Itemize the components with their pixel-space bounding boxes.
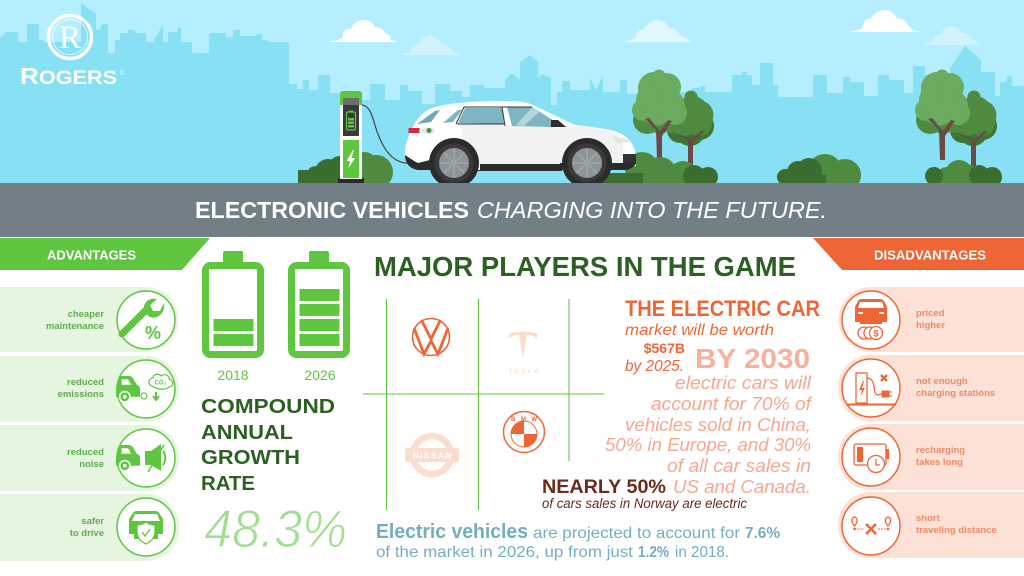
city skyline xyxy=(0,3,1024,184)
heading: compound annual growth rate: GROWTH xyxy=(201,447,300,469)
text block: by 2030: electric cars will xyxy=(675,372,812,393)
heading: major players: MAJOR PLAYERS IN THE GAME xyxy=(374,251,796,282)
bushes xyxy=(298,152,1002,191)
label: battery years: 2026 xyxy=(304,367,336,383)
text block: by 2030: 50% in Europe, and 30% xyxy=(605,434,811,455)
icon: Tesla logo: TESLA xyxy=(508,369,539,375)
row: reduced noise xyxy=(0,425,179,491)
text block: market share: 1.2% xyxy=(638,544,669,561)
label: battery years xyxy=(217,367,336,383)
row: cheaper maintenance: maintenance xyxy=(46,321,104,332)
icon: Nissan logo xyxy=(405,436,459,474)
text block: by 2030: of all car sales in xyxy=(667,455,811,476)
heading: compound annual growth rate: RATE xyxy=(201,473,255,495)
row: priced higher xyxy=(838,287,1024,352)
text block: by 2030: account for 70% of xyxy=(651,393,813,414)
text block: by 2030: US and Canada. xyxy=(673,476,811,497)
text block: electric car market xyxy=(625,296,820,375)
panel: logo grid xyxy=(363,299,604,510)
icon: battery 2026 xyxy=(292,251,346,354)
row: reduced noise: reduced xyxy=(67,447,104,458)
label: battery years: 2018 xyxy=(217,367,249,383)
cable xyxy=(362,105,429,163)
row: cheaper maintenance: % xyxy=(145,323,161,343)
row: reduced emissions: CO₂ xyxy=(155,380,167,386)
text block: market share: 7.6% xyxy=(745,525,780,542)
icon: white car xyxy=(405,101,636,188)
icon: logo Rogers: ROGERS xyxy=(20,63,117,89)
heading: disadvantages banner xyxy=(813,238,1024,270)
row: reduced noise: noise xyxy=(79,459,104,470)
row: not enough charging stations: charging stations xyxy=(916,388,995,399)
icon: logo Rogers: © xyxy=(120,70,125,77)
text block: by 2030 xyxy=(605,343,813,497)
icon: logo Rogers xyxy=(20,16,125,89)
title: ELECTRONIC VEHICLES xyxy=(195,197,469,223)
text block: electric car market: by 2025. xyxy=(625,358,684,375)
icon: charging station xyxy=(338,91,364,183)
text block: market share: of the market in 2026, up from just xyxy=(376,544,634,561)
text block: market share: in 2018. xyxy=(675,544,729,561)
row: safer to drive xyxy=(0,494,179,561)
text block: Norway xyxy=(542,477,747,511)
row: not enough charging stations: not enough xyxy=(916,376,968,387)
heading: compound annual growth rate xyxy=(201,396,335,495)
text block: electric car market: $567B xyxy=(644,340,685,356)
row: priced higher: higher xyxy=(916,320,945,331)
icon: Nissan logo: NISSAN xyxy=(412,450,452,460)
row: reduced emissions xyxy=(0,356,179,422)
trees xyxy=(632,70,997,166)
icon: BMW logo: BMW xyxy=(511,417,537,423)
heading: disadvantages banner: DISADVANTAGES xyxy=(874,248,986,262)
row: safer to drive: to drive xyxy=(70,528,104,539)
icon: logo Rogers: R xyxy=(59,20,81,56)
text block: by 2030: BY 2030 xyxy=(695,343,810,374)
row: short traveling distance: short xyxy=(916,513,941,524)
title: CHARGING INTO THE FUTURE. xyxy=(477,197,827,223)
row: reduced emissions: reduced xyxy=(67,377,104,388)
row: recharging takes long: recharging xyxy=(916,445,965,456)
row: short traveling distance: traveling distance xyxy=(916,525,997,536)
row: recharging takes long: takes long xyxy=(916,457,963,468)
icon: battery 2018 xyxy=(206,251,260,354)
text block: market share: are projected to account for xyxy=(533,525,741,542)
heading: advantages banner: ADVANTAGES xyxy=(47,248,136,262)
text block: electric car market: THE ELECTRIC CAR xyxy=(625,296,820,321)
row: not enough charging stations xyxy=(838,355,1024,421)
row: cheaper maintenance: cheaper xyxy=(68,309,104,320)
panel: disadvantages xyxy=(813,238,1024,558)
row: recharging takes long xyxy=(838,424,1024,490)
heading: compound annual growth rate: ANNUAL xyxy=(201,422,293,444)
row: safer to drive: safer xyxy=(81,516,104,527)
icon: BMW logo xyxy=(504,412,544,452)
stat: 48.3 percent: 48.3% xyxy=(204,500,347,559)
clouds xyxy=(330,10,982,55)
text block: Norway: NEARLY 50% xyxy=(542,477,666,498)
text block: electric car market: market will be worth xyxy=(625,322,774,339)
row: cheaper maintenance xyxy=(0,287,178,352)
text block: market share: Electric vehicles xyxy=(376,521,528,543)
icon: Volkswagen logo xyxy=(412,318,450,356)
text block: by 2030: vehicles sold in China, xyxy=(625,414,811,435)
row: priced higher: $ xyxy=(873,328,879,338)
panel: sky background xyxy=(0,0,1024,184)
panel: advantages xyxy=(0,238,210,561)
heading: advantages banner xyxy=(0,238,210,270)
text block: Norway: of cars sales in Norway are electric xyxy=(542,496,747,511)
heading: compound annual growth rate: COMPOUND xyxy=(201,396,335,418)
panel: title band xyxy=(0,183,1024,237)
text block: market share xyxy=(376,521,780,561)
icon: Tesla logo xyxy=(508,332,539,375)
row: short traveling distance xyxy=(838,492,1024,558)
row: priced higher: priced xyxy=(916,308,945,319)
row: reduced emissions: emissions xyxy=(58,389,104,400)
